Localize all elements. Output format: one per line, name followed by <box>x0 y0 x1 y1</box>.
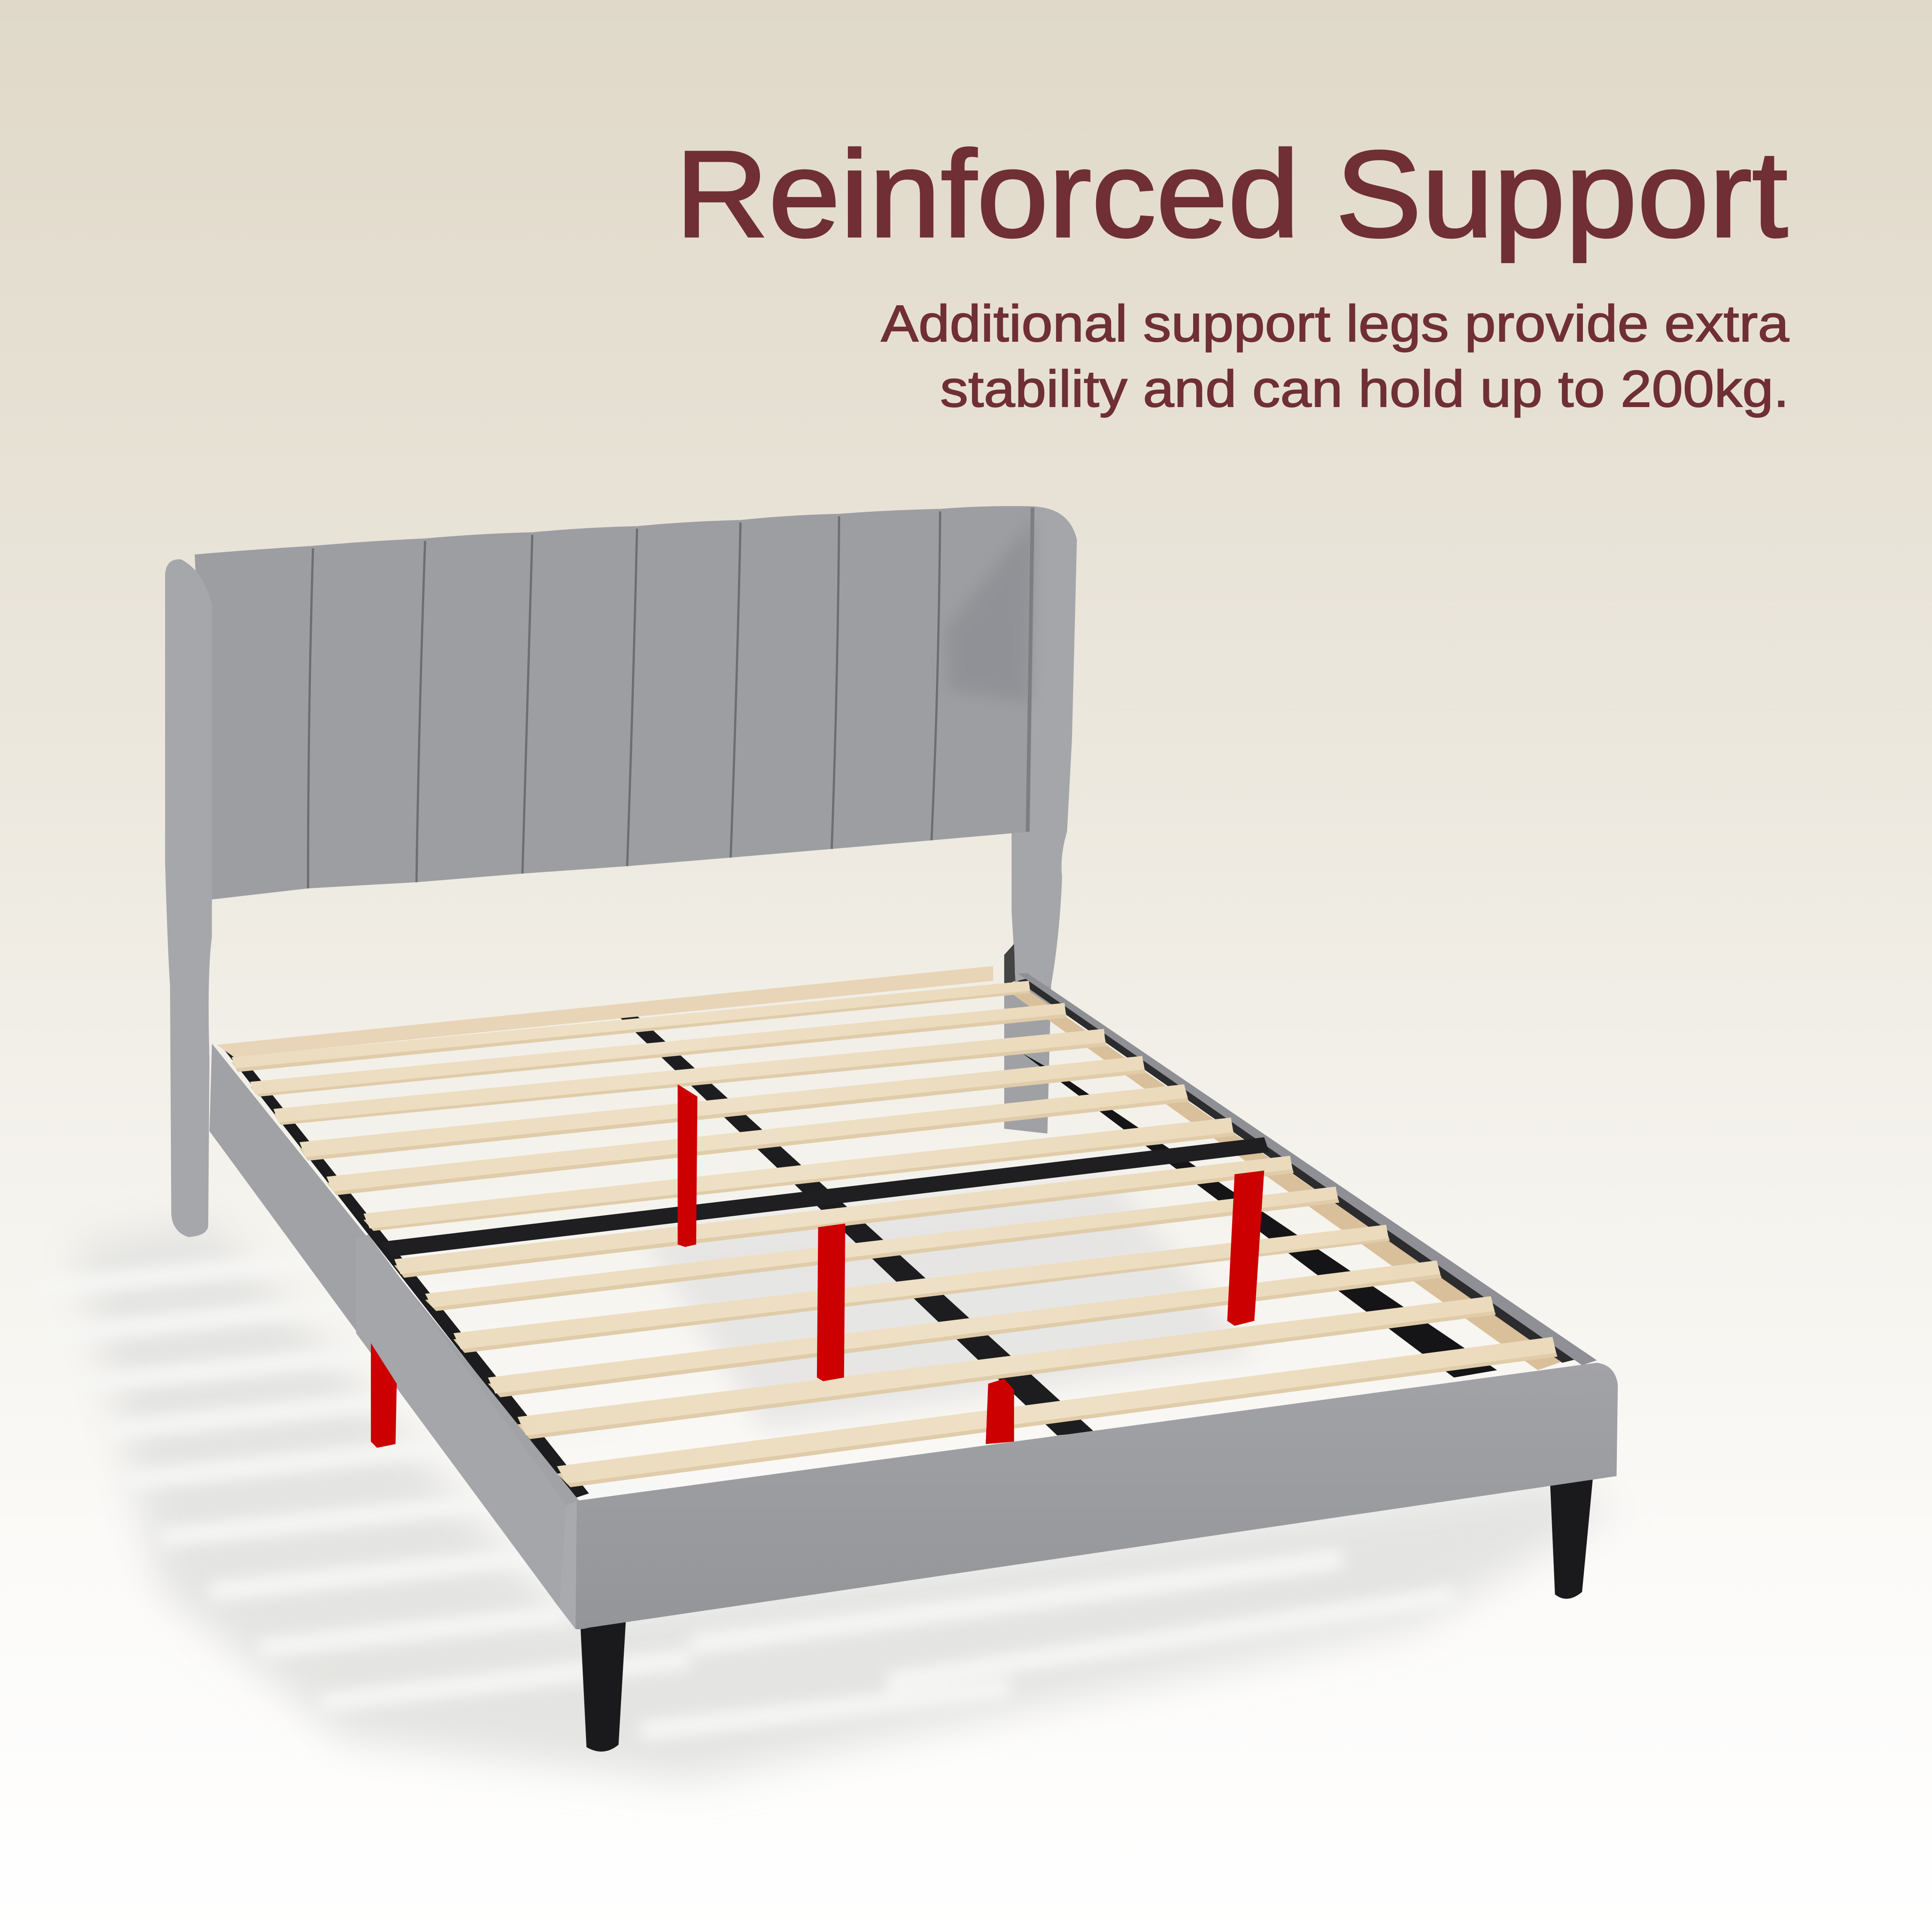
subtitle text <box>881 295 1789 418</box>
floor shadow <box>37 1177 1614 1780</box>
left side rail <box>210 1044 579 1608</box>
red support legs <box>371 1084 1264 1448</box>
headboard <box>165 506 1077 1237</box>
bracket <box>1004 944 1015 986</box>
right wing seam <box>1027 507 1033 832</box>
tufted channels <box>194 506 1035 899</box>
subtitle text: stability and can hold up to 200kg. <box>940 360 1789 418</box>
front rail <box>559 1363 1618 1629</box>
right side rail <box>1018 973 1597 1365</box>
left wing and post <box>165 559 212 1237</box>
right wooden ledge <box>1000 983 1562 1370</box>
left black lip <box>224 1050 589 1498</box>
black cross bar <box>380 1137 1269 1257</box>
front legs <box>580 1475 1593 1752</box>
wing cast shadow <box>945 517 1035 702</box>
title: Reinforced Support <box>675 125 1788 264</box>
back slat <box>217 966 993 1057</box>
centre spine <box>612 1008 1094 1435</box>
right black lip <box>1018 978 1577 1363</box>
frame interior supports <box>224 978 1577 1498</box>
right post lower shade <box>1004 986 1051 1133</box>
subtitle text: Additional support legs provide extra <box>881 295 1789 352</box>
right wing and post <box>1004 507 1077 1133</box>
right black rail <box>1023 1054 1497 1378</box>
channel seams <box>308 511 940 888</box>
wooden slats <box>232 981 1558 1487</box>
